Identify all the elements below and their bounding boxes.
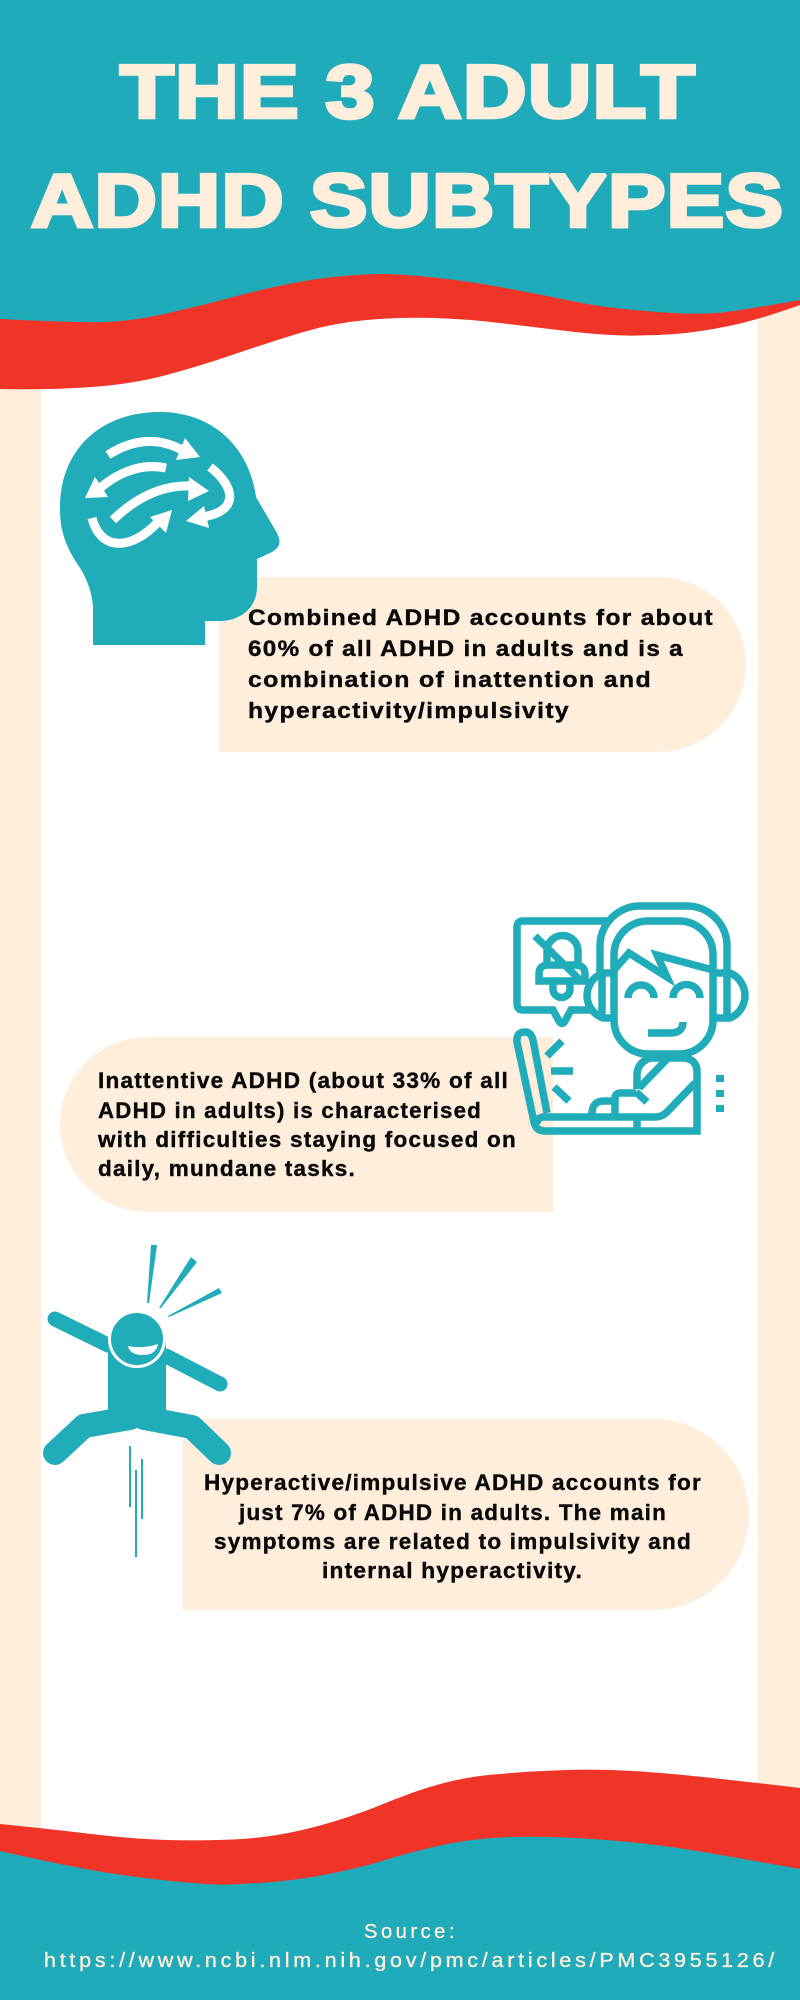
source citation: https://www.ncbi.nlm.nih.gov/pmc/articles/PMC3955126/ — [44, 1950, 778, 1972]
title: ADHD SUBTYPES — [31, 158, 784, 242]
panel: inattentive ADHD — [60, 1037, 553, 1212]
source citation: Source: — [364, 1921, 458, 1943]
top header wave — [0, 0, 800, 389]
title: THE 3 ADULT — [120, 50, 696, 134]
text: combined ADHD description — [248, 605, 714, 723]
text: hyperactive/impulsive ADHD description: symptoms are related to impulsivity and — [214, 1529, 692, 1554]
icon: person with headphones and laptop — [517, 906, 745, 1131]
text: inattentive ADHD description: daily, mundane tasks. — [98, 1156, 356, 1181]
icon: head with arrows — [60, 412, 279, 645]
text: combined ADHD description: hyperactivity/impulsivity — [248, 698, 570, 723]
text: combined ADHD description: combination of inattention and — [248, 667, 652, 692]
title — [31, 50, 784, 242]
panel: combined ADHD — [219, 577, 746, 752]
text: inattentive ADHD description: Inattentive ADHD (about 33% of all — [98, 1068, 509, 1093]
text: hyperactive/impulsive ADHD description: internal hyperactivity. — [322, 1558, 583, 1583]
text: hyperactive/impulsive ADHD description — [204, 1470, 702, 1583]
text: hyperactive/impulsive ADHD description: Hyperactive/impulsive ADHD accounts for — [204, 1470, 702, 1495]
source citation — [44, 1921, 778, 1972]
text: hyperactive/impulsive ADHD description: just 7% of ADHD in adults. The main — [238, 1500, 667, 1525]
icon: jumping figure — [55, 1245, 222, 1557]
panel: hyperactive/impulsive ADHD — [183, 1419, 749, 1610]
text: inattentive ADHD description — [97, 1068, 517, 1181]
text: inattentive ADHD description: with difficulties staying focused on — [97, 1127, 517, 1152]
bottom footer wave — [0, 1770, 800, 2000]
text: combined ADHD description: Combined ADHD accounts for about — [248, 605, 714, 630]
text: combined ADHD description: 60% of all ADHD in adults and is a — [248, 636, 684, 661]
text: inattentive ADHD description: ADHD in adults) is characterised — [98, 1098, 482, 1123]
